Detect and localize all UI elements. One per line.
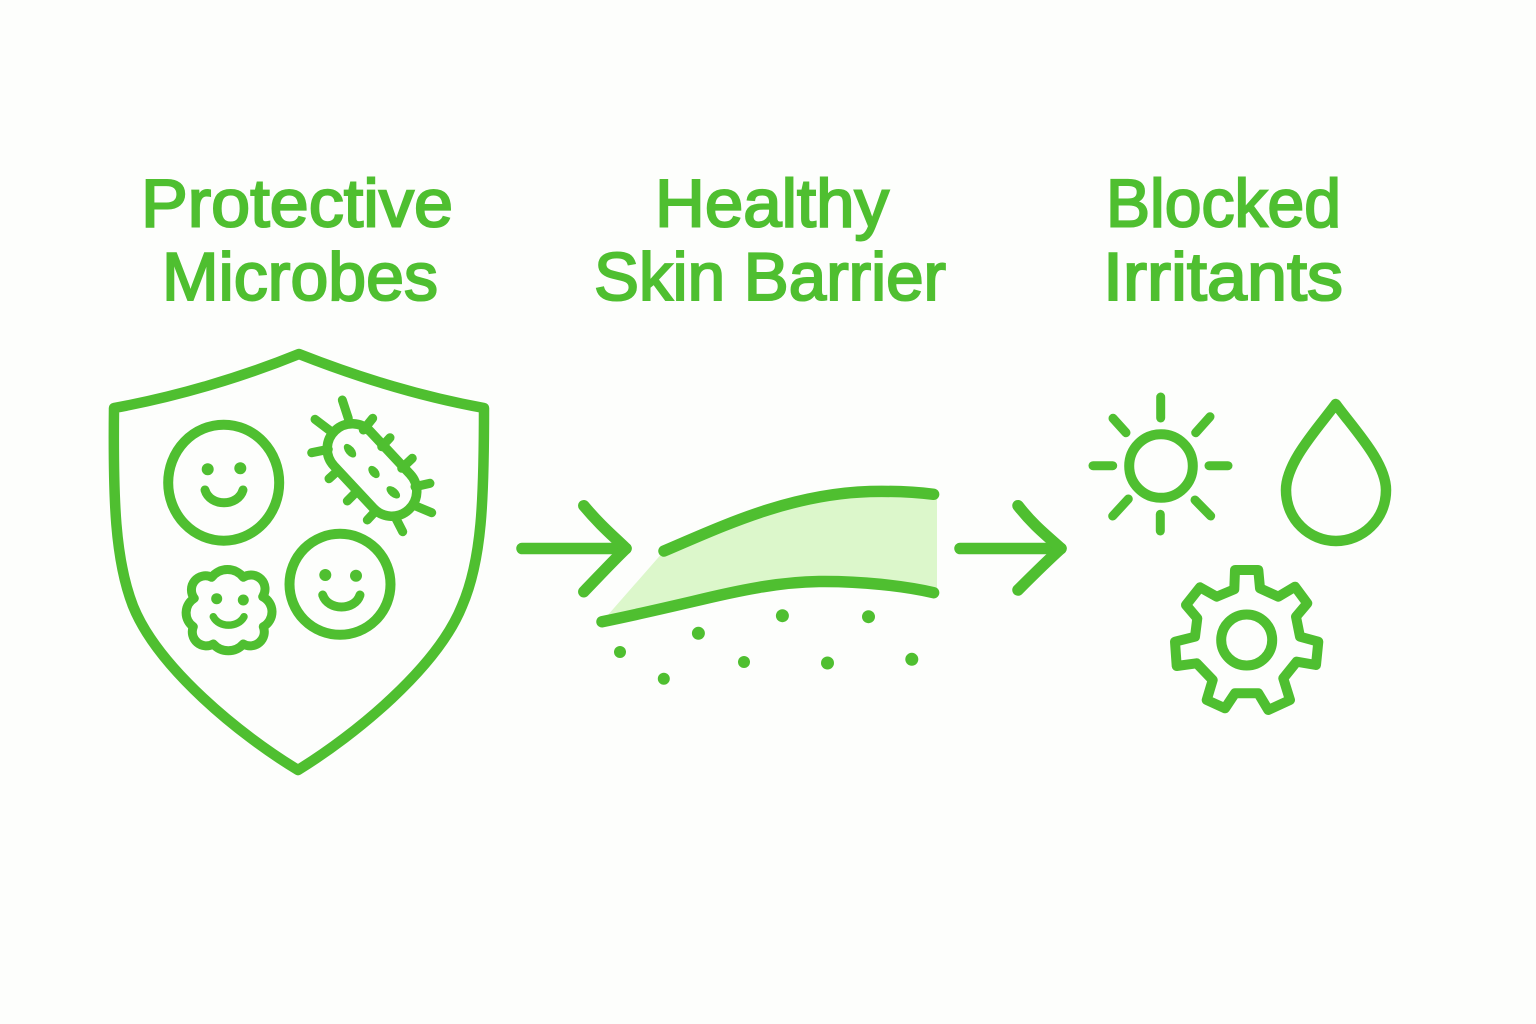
- arrow: barrier to irritants: [960, 506, 1061, 590]
- icon: sun: [1093, 397, 1228, 531]
- heading: Healthy Skin Barrier: Healthy: [655, 166, 889, 242]
- shield outline: [114, 354, 484, 770]
- heading: Protective Microbes: Protective: [141, 166, 453, 242]
- arrow: microbes to barrier: [522, 506, 626, 592]
- heading: Blocked Irritants: [1103, 166, 1343, 315]
- heading: Protective Microbes: Microbes: [162, 239, 438, 315]
- microbe: round smiling face: [290, 534, 390, 635]
- heading: Healthy Skin Barrier: [594, 166, 946, 315]
- icon: skin barrier layer: [602, 491, 937, 622]
- heading: Healthy Skin Barrier: Skin Barrier: [594, 239, 946, 315]
- icon: water drop: [1286, 404, 1386, 541]
- heading: Blocked Irritants: Blocked: [1106, 166, 1341, 242]
- microbe: large smiling face: [168, 425, 279, 541]
- heading: Blocked Irritants: Irritants: [1103, 239, 1343, 315]
- barrier bottom edge: [602, 581, 934, 622]
- icon: shield with microbes: [114, 354, 484, 770]
- microbe: rod bacterium with spikes: [312, 400, 432, 532]
- microbe: wavy smiling face: [186, 570, 272, 651]
- barrier top edge: [664, 491, 934, 551]
- particles below the barrier: [614, 609, 918, 685]
- icon: gear: [1175, 570, 1318, 710]
- heading: Protective Microbes: [141, 166, 453, 315]
